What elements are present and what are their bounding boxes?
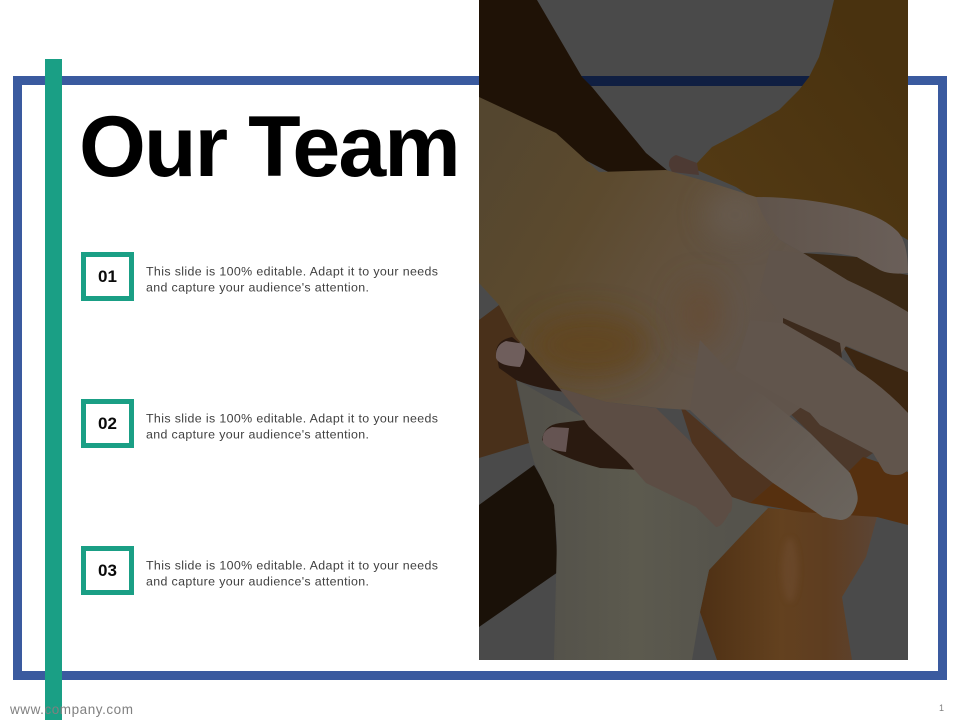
title: Our Team bbox=[79, 99, 459, 195]
number badge 01 bbox=[81, 252, 134, 301]
frame seen through photo bbox=[479, 76, 908, 86]
top-right arm bbox=[697, 0, 908, 240]
orange lower arm bbox=[700, 508, 877, 660]
text block 01: This slide is 100% editable. Adapt it to your needs bbox=[146, 264, 438, 278]
pale lower arm bbox=[517, 380, 768, 660]
little finger with long tip bbox=[690, 340, 858, 520]
text block 02: and capture your audience's attention. bbox=[146, 428, 369, 442]
text block 03: and capture your audience's attention. bbox=[146, 574, 369, 588]
orange arm highlight bbox=[782, 538, 798, 602]
back finger tone bbox=[763, 387, 873, 485]
number badge 03: 03 bbox=[98, 561, 117, 580]
upper-left finger nail bbox=[496, 341, 525, 367]
dark upper-left finger bbox=[496, 337, 565, 392]
brown hand behind left bbox=[479, 305, 529, 458]
brown wedge upper right bbox=[842, 345, 908, 413]
text block 02: This slide is 100% editable. Adapt it to your needs bbox=[146, 412, 438, 426]
number badge 02 bbox=[81, 399, 134, 448]
dark gap between index and middle bbox=[803, 253, 908, 313]
index finger bbox=[756, 197, 908, 274]
green vertical bar bbox=[45, 59, 62, 720]
photo backdrop bbox=[479, 0, 908, 660]
number badge 01: 01 bbox=[98, 267, 117, 286]
hand shading patches bbox=[530, 190, 765, 377]
text block 03: This slide is 100% editable. Adapt it to your needs bbox=[146, 558, 438, 572]
middle finger bbox=[760, 250, 908, 372]
top-left dark arm bbox=[479, 0, 668, 178]
brown gap by little finger bbox=[680, 405, 773, 503]
pale patch upper bbox=[714, 198, 748, 229]
dark thumb bbox=[542, 420, 640, 470]
page number: 1 bbox=[939, 703, 944, 713]
small finger tip at top bbox=[669, 155, 699, 175]
text block 01 bbox=[146, 264, 438, 294]
ring finger bbox=[735, 320, 908, 475]
dark thumb nail bbox=[543, 427, 569, 452]
mottled orange patch bbox=[530, 313, 650, 377]
thin shadow between middle and ring fingers bbox=[783, 318, 842, 358]
lower-left dark arm bbox=[479, 465, 558, 627]
text block 01: and capture your audience's attention. bbox=[146, 280, 369, 294]
main back of hand bbox=[479, 97, 850, 457]
number badge 02: 02 bbox=[98, 414, 117, 433]
footer url: www.company.com bbox=[10, 702, 134, 717]
text block 03 bbox=[146, 558, 438, 588]
orange band under fingers bbox=[750, 457, 908, 525]
number badge 03 bbox=[81, 546, 134, 595]
photo: stacked hands bbox=[479, 0, 908, 660]
inner thumb-side finger bbox=[559, 388, 732, 527]
text block 02 bbox=[146, 412, 438, 442]
rust patch centre bbox=[682, 290, 722, 344]
